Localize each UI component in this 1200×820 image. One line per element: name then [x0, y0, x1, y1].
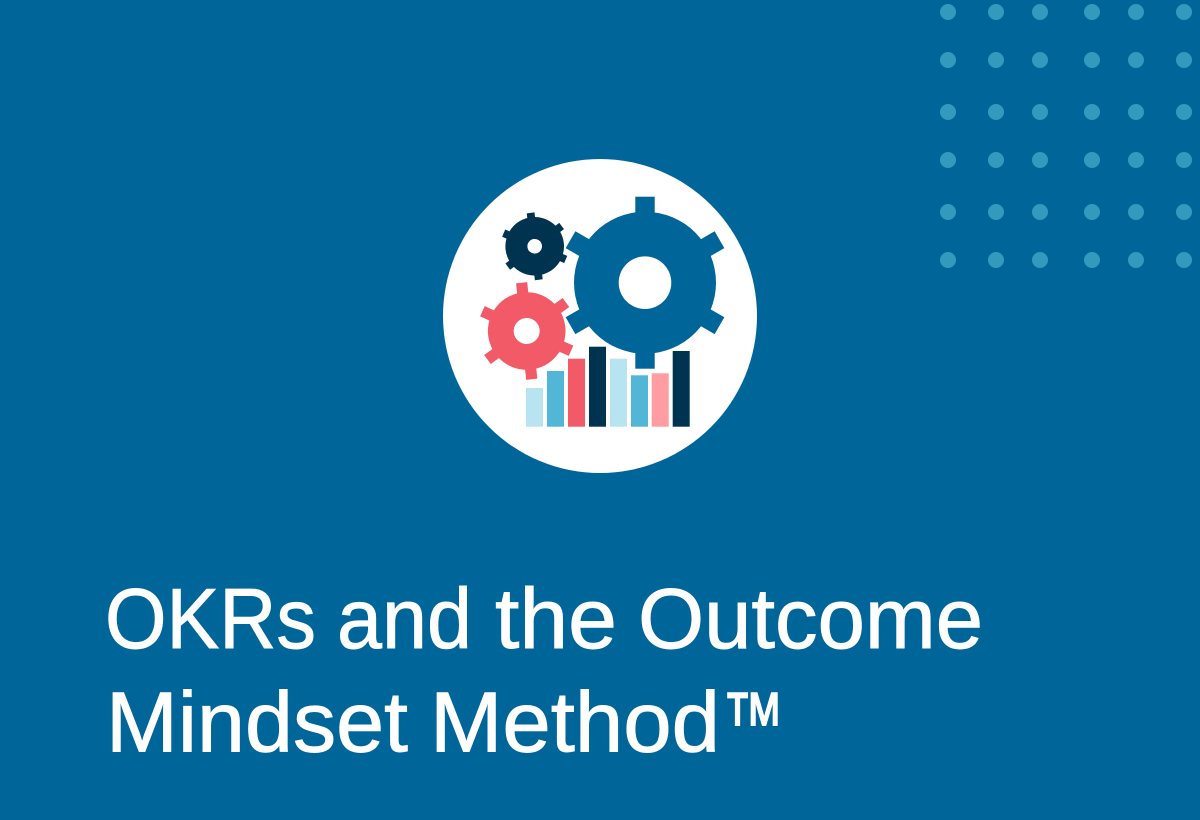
- title line 1: the: [495, 572, 617, 667]
- icon badge: gears and bar chart: [443, 159, 757, 473]
- title line 1: OKRs: [105, 572, 316, 667]
- dot grid decoration: [940, 4, 1192, 268]
- title line 1: and: [337, 572, 472, 667]
- title line 1: Outcome: [638, 572, 983, 667]
- icon: medium red gear: [477, 278, 576, 384]
- title line 2: Mindset: [106, 676, 408, 771]
- bar chart: [526, 347, 690, 427]
- title line 2: [106, 676, 784, 771]
- title line 1: [105, 572, 983, 667]
- icon: small navy gear: [500, 209, 570, 284]
- title: [105, 572, 983, 771]
- icon: large blue gear: [566, 197, 724, 369]
- title line 2: ™: [722, 676, 784, 771]
- white circle background: [443, 159, 757, 473]
- title line 2: Method: [430, 676, 720, 771]
